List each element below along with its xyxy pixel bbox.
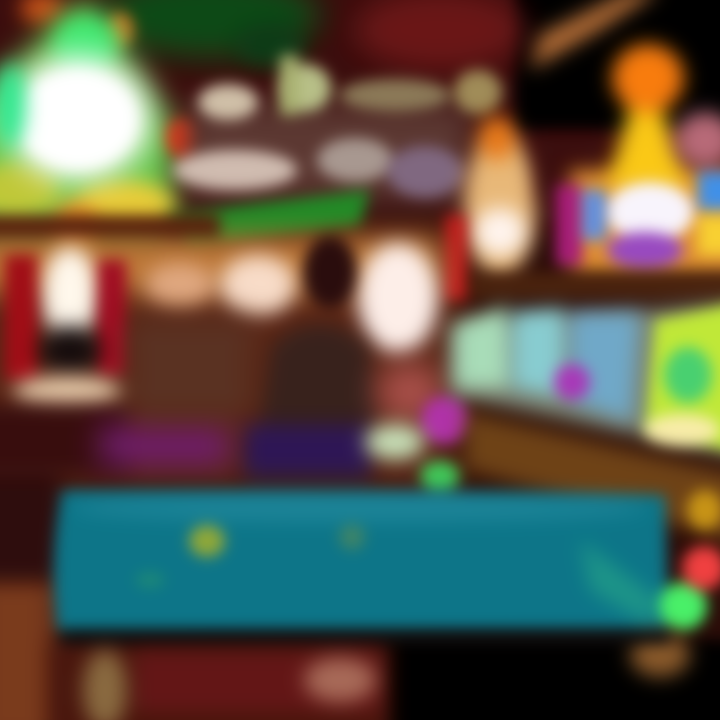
sign: centre lantern bbox=[445, 116, 600, 300]
background machines: row of lights bbox=[0, 215, 440, 475]
sign: blurred header lettering bbox=[173, 55, 502, 200]
table: front rail bbox=[60, 630, 670, 720]
machine console: wooden ledge bbox=[465, 412, 720, 545]
table: teal felt bbox=[54, 490, 668, 632]
ceiling: green and red canopy bbox=[20, 0, 660, 70]
player: arm and buttons bbox=[365, 362, 469, 491]
slot machine screens bbox=[450, 300, 720, 460]
sign: left glowing green star bbox=[0, 0, 198, 249]
table: right edge chips bbox=[630, 490, 720, 677]
player: seated silhouette bbox=[245, 236, 378, 485]
sign: right crown display bbox=[470, 44, 720, 298]
sign: green lower banner bbox=[165, 190, 370, 245]
